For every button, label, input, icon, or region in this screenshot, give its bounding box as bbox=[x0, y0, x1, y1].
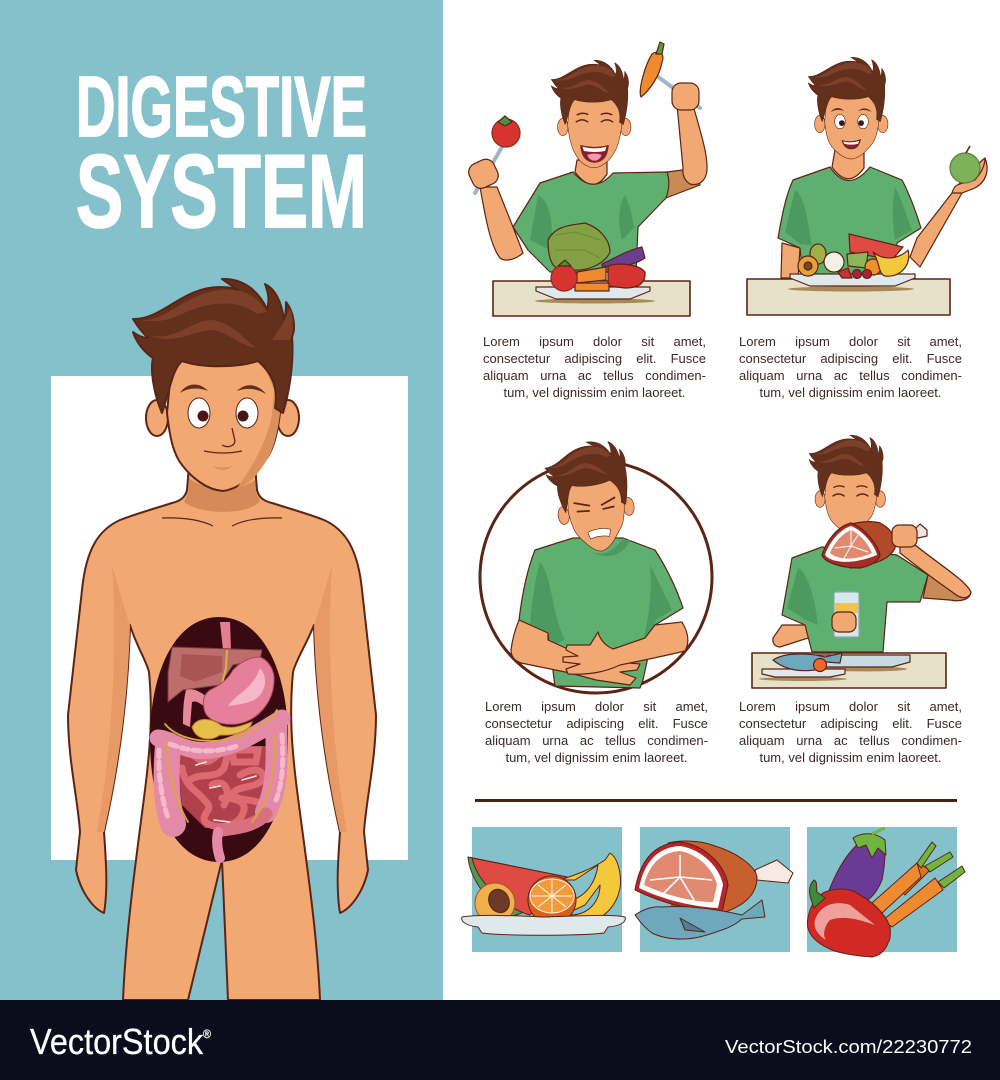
tile: fruit bbox=[462, 827, 625, 952]
eggplant bbox=[828, 841, 885, 900]
ham bbox=[668, 841, 757, 913]
shirt folds bbox=[785, 187, 912, 245]
table bbox=[752, 653, 946, 688]
head bbox=[133, 279, 299, 491]
bananas bbox=[560, 853, 621, 921]
text block 3: consectetur adipiscing elit. Fusce bbox=[485, 716, 708, 731]
text block 3: Lorem ipsum dolor sit amet, bbox=[485, 699, 708, 714]
stomach bbox=[203, 657, 274, 724]
table bbox=[493, 281, 690, 316]
fish bbox=[635, 900, 765, 939]
large intestine bbox=[158, 710, 283, 858]
fork with carrot bbox=[640, 42, 700, 108]
plates with fish bbox=[759, 653, 910, 681]
text block 1: aliquam urna ac tellus condimen- bbox=[483, 368, 706, 383]
hands bbox=[466, 83, 699, 191]
glass of juice bbox=[832, 592, 859, 637]
oesophagus bbox=[220, 622, 231, 650]
pancreas bbox=[192, 719, 252, 739]
divider bbox=[475, 799, 957, 802]
illustration: internal organs bbox=[150, 617, 288, 862]
title: SYSTEM bbox=[76, 134, 367, 250]
panel: white square behind body bbox=[51, 376, 408, 860]
liver bbox=[168, 647, 262, 702]
text block 2 bbox=[739, 334, 962, 400]
ham with bone and hand bbox=[822, 522, 927, 568]
footer image id: VectorStock.com/22230772 bbox=[725, 1037, 972, 1057]
shirt bbox=[519, 538, 683, 688]
illustration: man eating vegetables bbox=[466, 42, 707, 316]
shirt bbox=[782, 547, 928, 652]
text block 2: consectetur adipiscing elit. Fusce bbox=[739, 351, 962, 366]
tile: meat and fish bbox=[635, 827, 793, 952]
footer logo: ® bbox=[203, 1027, 211, 1041]
small intestine bbox=[175, 746, 267, 828]
fork with tomato bbox=[475, 116, 520, 193]
text block 4: aliquam urna ac tellus condimen- bbox=[739, 733, 962, 748]
watermelon bbox=[468, 857, 567, 917]
red pepper bbox=[807, 889, 890, 957]
head bbox=[542, 437, 640, 557]
illustration: man eating fruit bbox=[747, 57, 987, 315]
text block 2: tum, vel dignissim enim laoreet. bbox=[759, 385, 942, 400]
body silhouette bbox=[68, 465, 376, 1000]
title: DIGESTIVE bbox=[76, 60, 367, 155]
head bbox=[809, 435, 885, 533]
footer bar bbox=[0, 1000, 1000, 1080]
arms bbox=[781, 158, 986, 278]
text block 3: aliquam urna ac tellus condimen- bbox=[485, 733, 708, 748]
shirt fold bbox=[787, 568, 818, 625]
title bbox=[76, 60, 367, 250]
carrots bbox=[900, 863, 930, 895]
arms bbox=[480, 105, 707, 260]
bone bbox=[755, 860, 793, 883]
neck shading bbox=[184, 478, 260, 512]
text block 1 bbox=[483, 334, 706, 400]
text block 3: tum, vel dignissim enim laoreet. bbox=[505, 750, 688, 765]
text block 3 bbox=[485, 699, 708, 765]
upper right arm bbox=[900, 545, 971, 601]
shirt folds bbox=[530, 195, 634, 250]
panel: left blue background bbox=[0, 0, 443, 1000]
plate of vegetables bbox=[535, 223, 655, 304]
chest lines bbox=[162, 518, 282, 526]
head bbox=[808, 57, 888, 159]
circle bbox=[480, 461, 712, 693]
neck bbox=[832, 150, 864, 179]
arm shading bbox=[97, 565, 347, 832]
body cavity bbox=[150, 617, 288, 862]
text block 4: consectetur adipiscing elit. Fusce bbox=[739, 716, 962, 731]
text block 4: tum, vel dignissim enim laoreet. bbox=[759, 750, 942, 765]
footer logo: VectorStock bbox=[30, 1021, 222, 1062]
head bbox=[551, 60, 631, 168]
figure: human body bbox=[68, 279, 376, 1000]
left arm bbox=[773, 622, 833, 647]
shirt bbox=[778, 167, 921, 278]
shirt folds bbox=[530, 540, 672, 650]
text block 1: tum, vel dignissim enim laoreet. bbox=[503, 385, 686, 400]
text block 1: Lorem ipsum dolor sit amet, bbox=[483, 334, 706, 349]
neck bbox=[575, 160, 607, 185]
arms bbox=[511, 620, 688, 685]
forearm bbox=[900, 545, 971, 598]
text block 2: aliquam urna ac tellus condimen- bbox=[739, 368, 962, 383]
table bbox=[747, 279, 950, 315]
plate of fruit bbox=[788, 234, 915, 292]
illustration: man with stomach ache in circle bbox=[480, 437, 712, 693]
illustration: man eating ham bbox=[752, 435, 971, 688]
shirt bbox=[513, 172, 669, 272]
apple and hand bbox=[950, 146, 987, 193]
duodenum bbox=[183, 689, 207, 727]
orange bbox=[528, 876, 576, 924]
plate bbox=[462, 915, 625, 935]
text block 4 bbox=[739, 699, 962, 765]
tile: vegetables bbox=[807, 827, 965, 957]
text block 4: Lorem ipsum dolor sit amet, bbox=[739, 699, 962, 714]
text block 1: consectetur adipiscing elit. Fusce bbox=[483, 351, 706, 366]
peach bbox=[475, 883, 515, 923]
text block 2: Lorem ipsum dolor sit amet, bbox=[739, 334, 962, 349]
